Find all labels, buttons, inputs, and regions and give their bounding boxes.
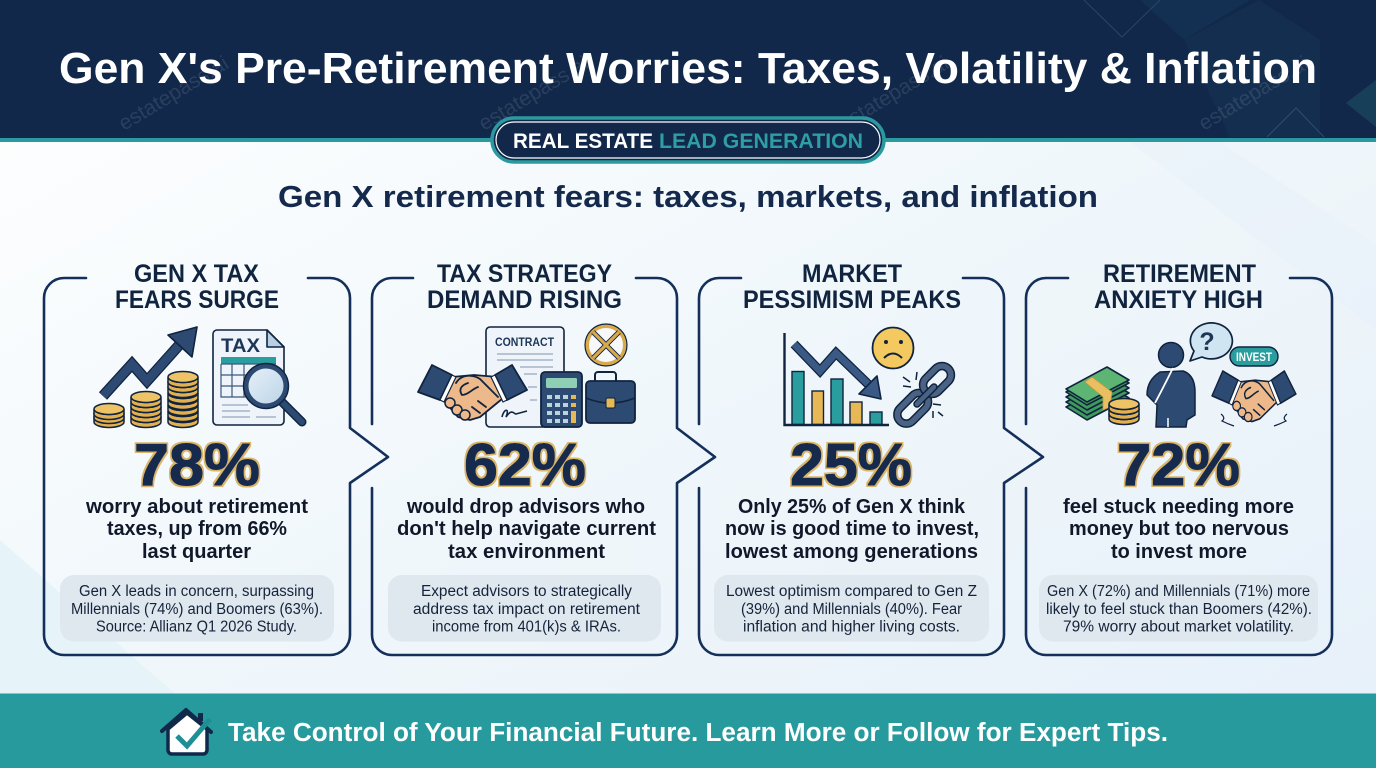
statistic: 78%: 78%: [134, 432, 260, 498]
note box: [714, 575, 989, 642]
heading: tax strategy demand rising: TAX STRATEGY: [437, 260, 612, 288]
badge: real estate lead generation: LEAD GENERATION: [659, 130, 863, 153]
panel: retirement anxiety: [1026, 260, 1332, 655]
note box: (39%) and Millennials (40%). Fear: [741, 601, 962, 618]
footer band: [0, 694, 1376, 768]
icon: briefcase: [586, 372, 635, 423]
icon: rising arrow and coins: [94, 327, 198, 428]
icon: cash and coins: [1066, 367, 1139, 424]
icon: contract: [486, 327, 564, 427]
description: taxes, up from 66%: [107, 518, 287, 540]
description: don't help navigate current: [397, 518, 656, 540]
badge: real estate lead generation: REAL ESTATE: [513, 130, 653, 153]
header band: [0, 0, 1376, 142]
heading: gen x tax fears surge: GEN X TAX: [134, 260, 259, 288]
panel: tax strategy demand: [372, 260, 715, 655]
description: worry about retirement: [85, 496, 308, 518]
heading: gen x tax fears surge: [115, 260, 279, 314]
icon: calculator: [541, 372, 582, 427]
heading: retirement anxiety high: [1094, 260, 1263, 314]
description: last quarter: [142, 541, 251, 563]
statistic: 25%: 25%: [790, 432, 912, 498]
note box: Millennials (74%) and Boomers (63%).: [71, 601, 323, 618]
note box: [388, 575, 661, 642]
description: Only 25% of Gen X think: [738, 496, 966, 518]
icon: falling bar chart: [784, 333, 889, 425]
note box: [1039, 575, 1318, 642]
statistic: 72%: 72%: [1117, 432, 1240, 498]
watermarks: [115, 52, 1313, 135]
note box: income from 401(k)s & IRAs.: [432, 618, 621, 636]
badge: real estate lead generation: [492, 118, 884, 162]
note box: likely to feel stuck than Boomers (42%).: [1046, 601, 1312, 618]
watermarks: estatepass.ai: [475, 52, 593, 135]
watermarks: estatepass.ai: [115, 52, 233, 135]
description: feel stuck needing more: [1063, 496, 1294, 518]
icon: question bubble: ?: [1199, 328, 1215, 356]
note box: Lowest optimism compared to Gen Z: [726, 583, 977, 600]
watermarks: estatepass.ai: [1195, 52, 1313, 135]
description: tax environment: [448, 541, 605, 563]
heading: gen x tax fears surge: FEARS SURGE: [115, 286, 279, 314]
note box: Gen X leads in concern, surpassing: [79, 583, 314, 600]
heading: tax strategy demand rising: DEMAND RISING: [427, 286, 622, 314]
icon: house with check: [162, 710, 211, 754]
description: lowest among generations: [725, 541, 978, 563]
note box: address tax impact on retirement: [413, 601, 641, 618]
description: [397, 496, 656, 563]
heading: market pessimism peaks: MARKET: [802, 260, 902, 288]
heading: market pessimism peaks: PESSIMISM PEAKS: [743, 286, 961, 314]
description: [85, 496, 308, 563]
note box: inflation and higher living costs.: [743, 618, 960, 636]
icon: worried person: [1147, 342, 1195, 427]
panel: market pessimism: [699, 260, 1043, 655]
note box: Expect advisors to strategically: [421, 583, 632, 600]
statistic: 62%: 62%: [464, 432, 586, 498]
heading: retirement anxiety high: ANXIETY HIGH: [1094, 286, 1263, 314]
panel: gen x tax fears: [44, 260, 388, 655]
icon: question bubble: [1190, 323, 1232, 361]
icon: invest pill: INVEST: [1236, 352, 1272, 364]
description: [725, 496, 979, 563]
note box: Gen X (72%) and Millennials (71%) more: [1047, 583, 1310, 600]
icon: nervous handshake: [1212, 371, 1296, 426]
icon: contract: CONTRACT: [495, 335, 555, 349]
note box: [60, 575, 334, 642]
watermarks: estatepass.ai: [835, 52, 953, 135]
description: to invest more: [1111, 541, 1247, 563]
subtitle: Gen X retirement fears: taxes, markets, and inflation: [278, 179, 1098, 214]
description: now is good time to invest,: [725, 518, 979, 540]
description: money but too nervous: [1069, 518, 1289, 540]
title: Gen X's Pre-Retirement Worries: Taxes, Volatility & Inflation: [59, 44, 1317, 93]
icon: tax document with magnifier: TAX: [221, 336, 260, 357]
heading: retirement anxiety high: RETIREMENT: [1103, 260, 1256, 288]
heading: market pessimism peaks: [743, 260, 961, 314]
call to action: Take Control of Your Financial Future. Learn More or Follow for Expert Tips.: [228, 719, 1168, 747]
note box: Source: Allianz Q1 2026 Study.: [96, 618, 297, 636]
heading: tax strategy demand rising: [427, 260, 622, 314]
icon: broken chain: [894, 362, 955, 427]
icon: sad face: [872, 328, 914, 368]
note box: 79% worry about market volatility.: [1063, 618, 1294, 636]
icon: handshake: [418, 365, 527, 420]
icon: gold crossed circle: [585, 324, 627, 366]
icon: invest pill: [1230, 347, 1278, 366]
icon: tax document with magnifier: [213, 330, 302, 425]
description: would drop advisors who: [406, 496, 645, 518]
description: [1063, 496, 1294, 563]
